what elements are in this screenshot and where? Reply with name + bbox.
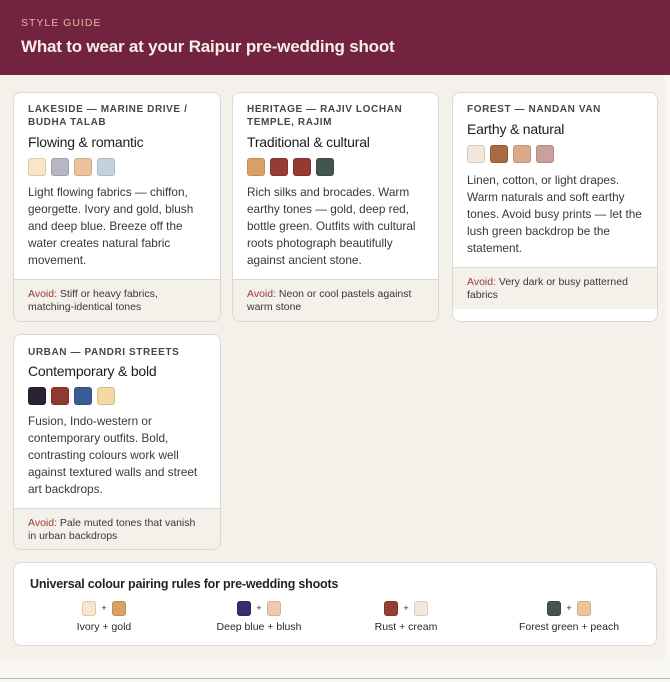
location label: [28, 104, 187, 128]
location label: [247, 104, 402, 128]
pair: ivory gold: Ivory + gold: [77, 621, 131, 633]
panel: heritage: [232, 92, 439, 322]
panel: lakeside: [13, 92, 221, 322]
avoid note: Avoid: Stiff or heavy fabrics,: [28, 288, 158, 300]
avoid note: [14, 508, 220, 551]
pair: rust cream: +: [403, 603, 409, 613]
kicker: STYLE GUIDE: [21, 17, 101, 29]
swatches: [247, 158, 334, 176]
style heading: Contemporary & bold: [28, 363, 156, 379]
description: Linen, cotton, or light drapes. Warm naturals and soft earthy tones. Avoid busy prints — let the lush green backdrop be the statement.: [467, 173, 642, 255]
pair: green peach: Forest green + peach: [519, 621, 619, 633]
avoid note: [453, 267, 657, 309]
header: [0, 0, 670, 75]
description: Fusion, Indo-western or contemporary outfits. Bold, contrasting colours work well against textured walls and street art backdrops.: [28, 414, 197, 496]
avoid note: in urban backdrops: [28, 530, 117, 542]
style heading: Flowing & romantic: [28, 134, 143, 150]
location label: TEMPLE, RAJIM: [247, 117, 332, 128]
location label: FOREST — NANDAN VAN: [467, 104, 601, 115]
pair: ivory gold: [77, 601, 131, 633]
swatches: [467, 145, 554, 163]
location label: LAKESIDE — MARINE DRIVE /: [28, 104, 187, 115]
style heading: Traditional & cultural: [247, 134, 370, 150]
pair: blue blush: [217, 601, 301, 633]
avoid note: Avoid: Pale muted tones that vanish: [28, 517, 195, 529]
pair: rust cream: Rust + cream: [375, 621, 437, 633]
pair: blue blush: Deep blue + blush: [217, 621, 301, 633]
pair: ivory gold: +: [101, 603, 107, 613]
avoid note: warm stone: [247, 301, 301, 313]
avoid note: [233, 279, 438, 323]
title: What to wear at your Raipur pre-wedding shoot: [21, 37, 395, 56]
avoid note: Avoid: Neon or cool pastels against: [247, 288, 411, 300]
pair: green peach: +: [566, 603, 572, 613]
pairing title: Universal colour pairing rules for pre-wedding shoots: [30, 577, 338, 591]
avoid note: fabrics: [467, 289, 498, 301]
avoid note: Avoid: Very dark or busy patterned: [467, 276, 628, 288]
avoid note: [14, 279, 220, 323]
swatches: [28, 387, 115, 405]
panel: forest: [452, 92, 658, 322]
panel: urban: [13, 334, 221, 550]
location label: BUDHA TALAB: [28, 117, 106, 128]
pair: blue blush: +: [256, 603, 262, 613]
pair: green peach: [519, 601, 619, 633]
pair: rust cream: [375, 601, 437, 633]
location label: URBAN — PANDRI STREETS: [28, 347, 179, 358]
style heading: Earthy & natural: [467, 121, 564, 137]
description: Rich silks and brocades. Warm earthy tones — gold, deep red, bottle green. Outfits with cultural roots photograph beautifully against ancient stone.: [247, 185, 416, 267]
panel: colour pairing rules: [13, 562, 657, 646]
swatches: [28, 158, 115, 176]
location label: HERITAGE — RAJIV LOCHAN: [247, 104, 402, 115]
description: Light flowing fabrics — chiffon, georgette. Ivory and gold, blush and deep blue. Breeze off the water creates natural fabric movement.: [28, 185, 193, 267]
avoid note: matching-identical tones: [28, 301, 141, 313]
